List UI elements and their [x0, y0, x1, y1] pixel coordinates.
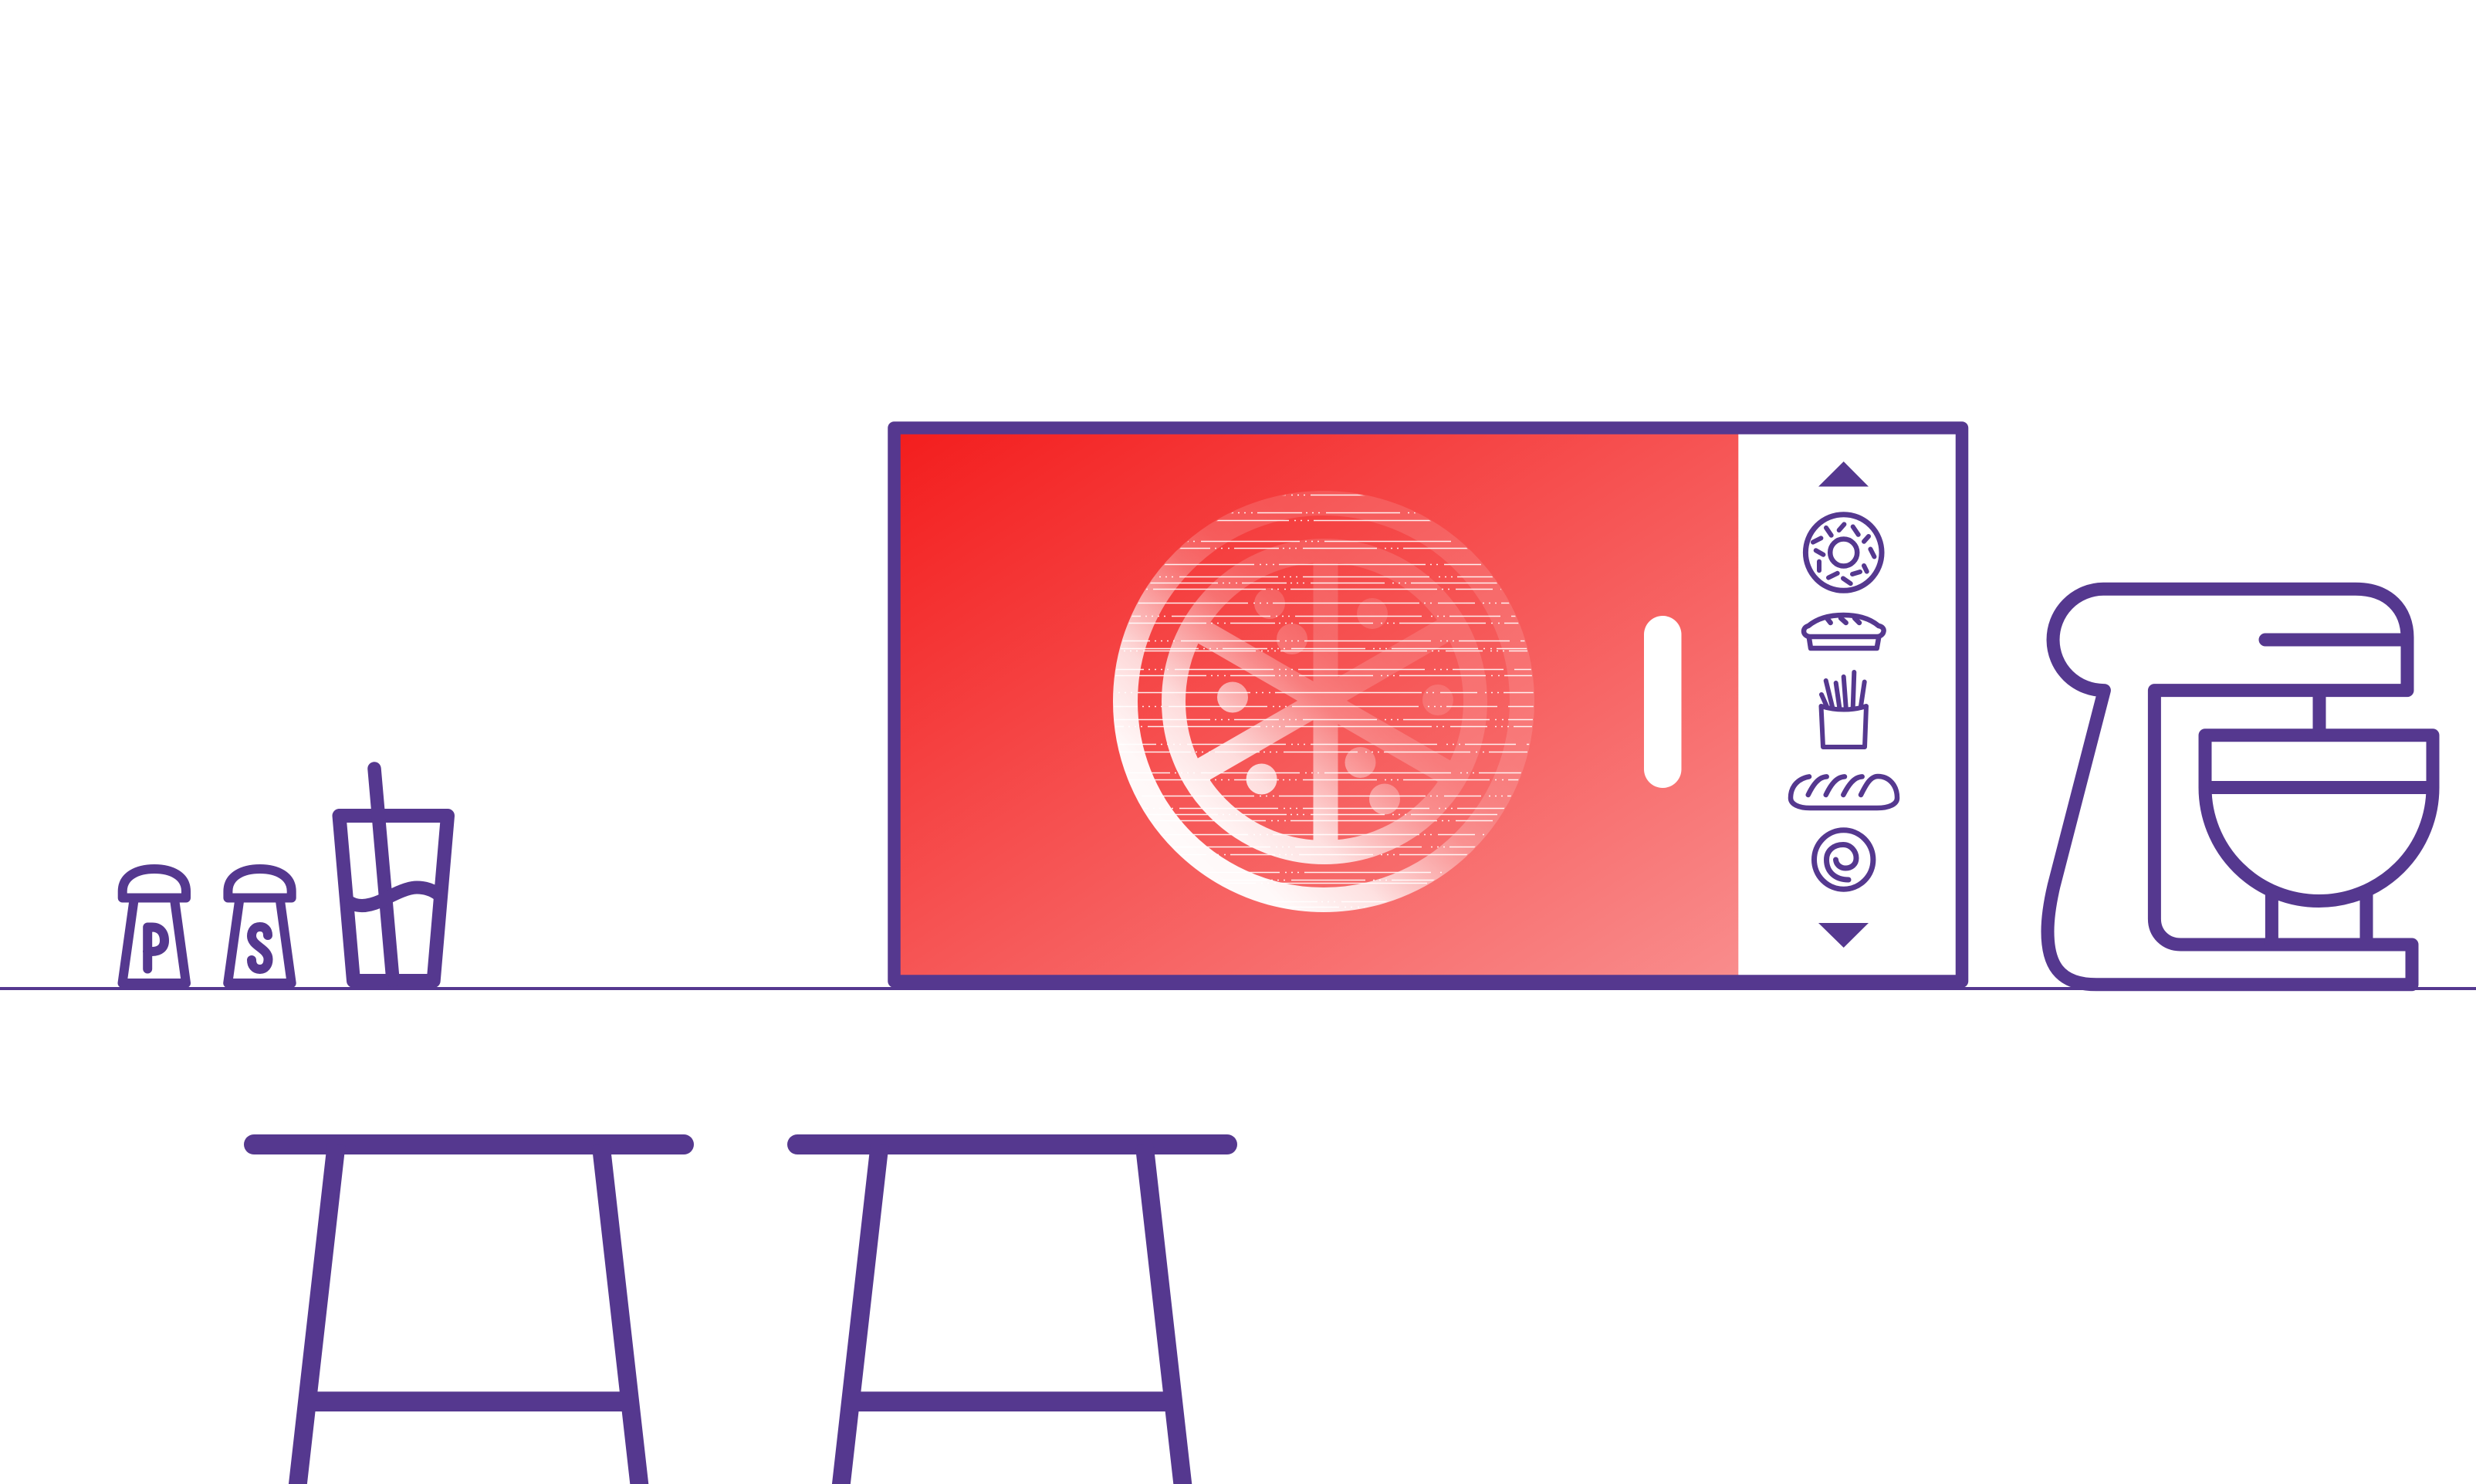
icon: down arrow [1818, 923, 1869, 948]
pizza outer crust [1125, 503, 1522, 900]
icon: cinnamon roll [1814, 830, 1873, 889]
mixer bowl rim [2205, 781, 2433, 794]
stool right crossbar [852, 1391, 1172, 1411]
pizza slice spokes [1198, 563, 1450, 840]
stool left seat [244, 1134, 694, 1154]
pizza shape with fading opacity [1125, 503, 1522, 900]
icon: pepper shaker [122, 869, 186, 983]
mixer feet [2271, 891, 2366, 945]
mixer body [2048, 589, 2412, 985]
pizza toppings [1217, 588, 1453, 815]
door handle [1644, 616, 1681, 788]
icon: up arrow [1818, 461, 1869, 486]
icon: donut [1805, 515, 1882, 590]
stool left crossbar [309, 1391, 628, 1411]
stool right legs [840, 1144, 1184, 1484]
stool left [244, 1134, 694, 1484]
icon: drinking cup with straw [340, 769, 448, 981]
pizza inner crust [1173, 551, 1476, 852]
microwave frame [894, 428, 1962, 982]
stool right [787, 1134, 1237, 1484]
icon: baguette [1791, 776, 1897, 808]
icon: pizza [1074, 495, 1544, 908]
counter line [0, 987, 2476, 990]
icon: salt shaker [228, 869, 292, 983]
pizza scan line glitch [1114, 494, 1534, 908]
icon: stand mixer [2048, 589, 2433, 985]
menu side panel [1738, 428, 1962, 981]
mixer stem [2312, 691, 2326, 735]
mixer head line [2265, 633, 2407, 647]
stool right seat [787, 1134, 1237, 1154]
icon: french fries [1821, 672, 1866, 747]
mixer bowl [2205, 735, 2433, 901]
microwave screen gradient [894, 428, 1739, 981]
icon: pie [1804, 615, 1884, 648]
stool left legs [296, 1144, 641, 1484]
microwave [894, 428, 1962, 982]
